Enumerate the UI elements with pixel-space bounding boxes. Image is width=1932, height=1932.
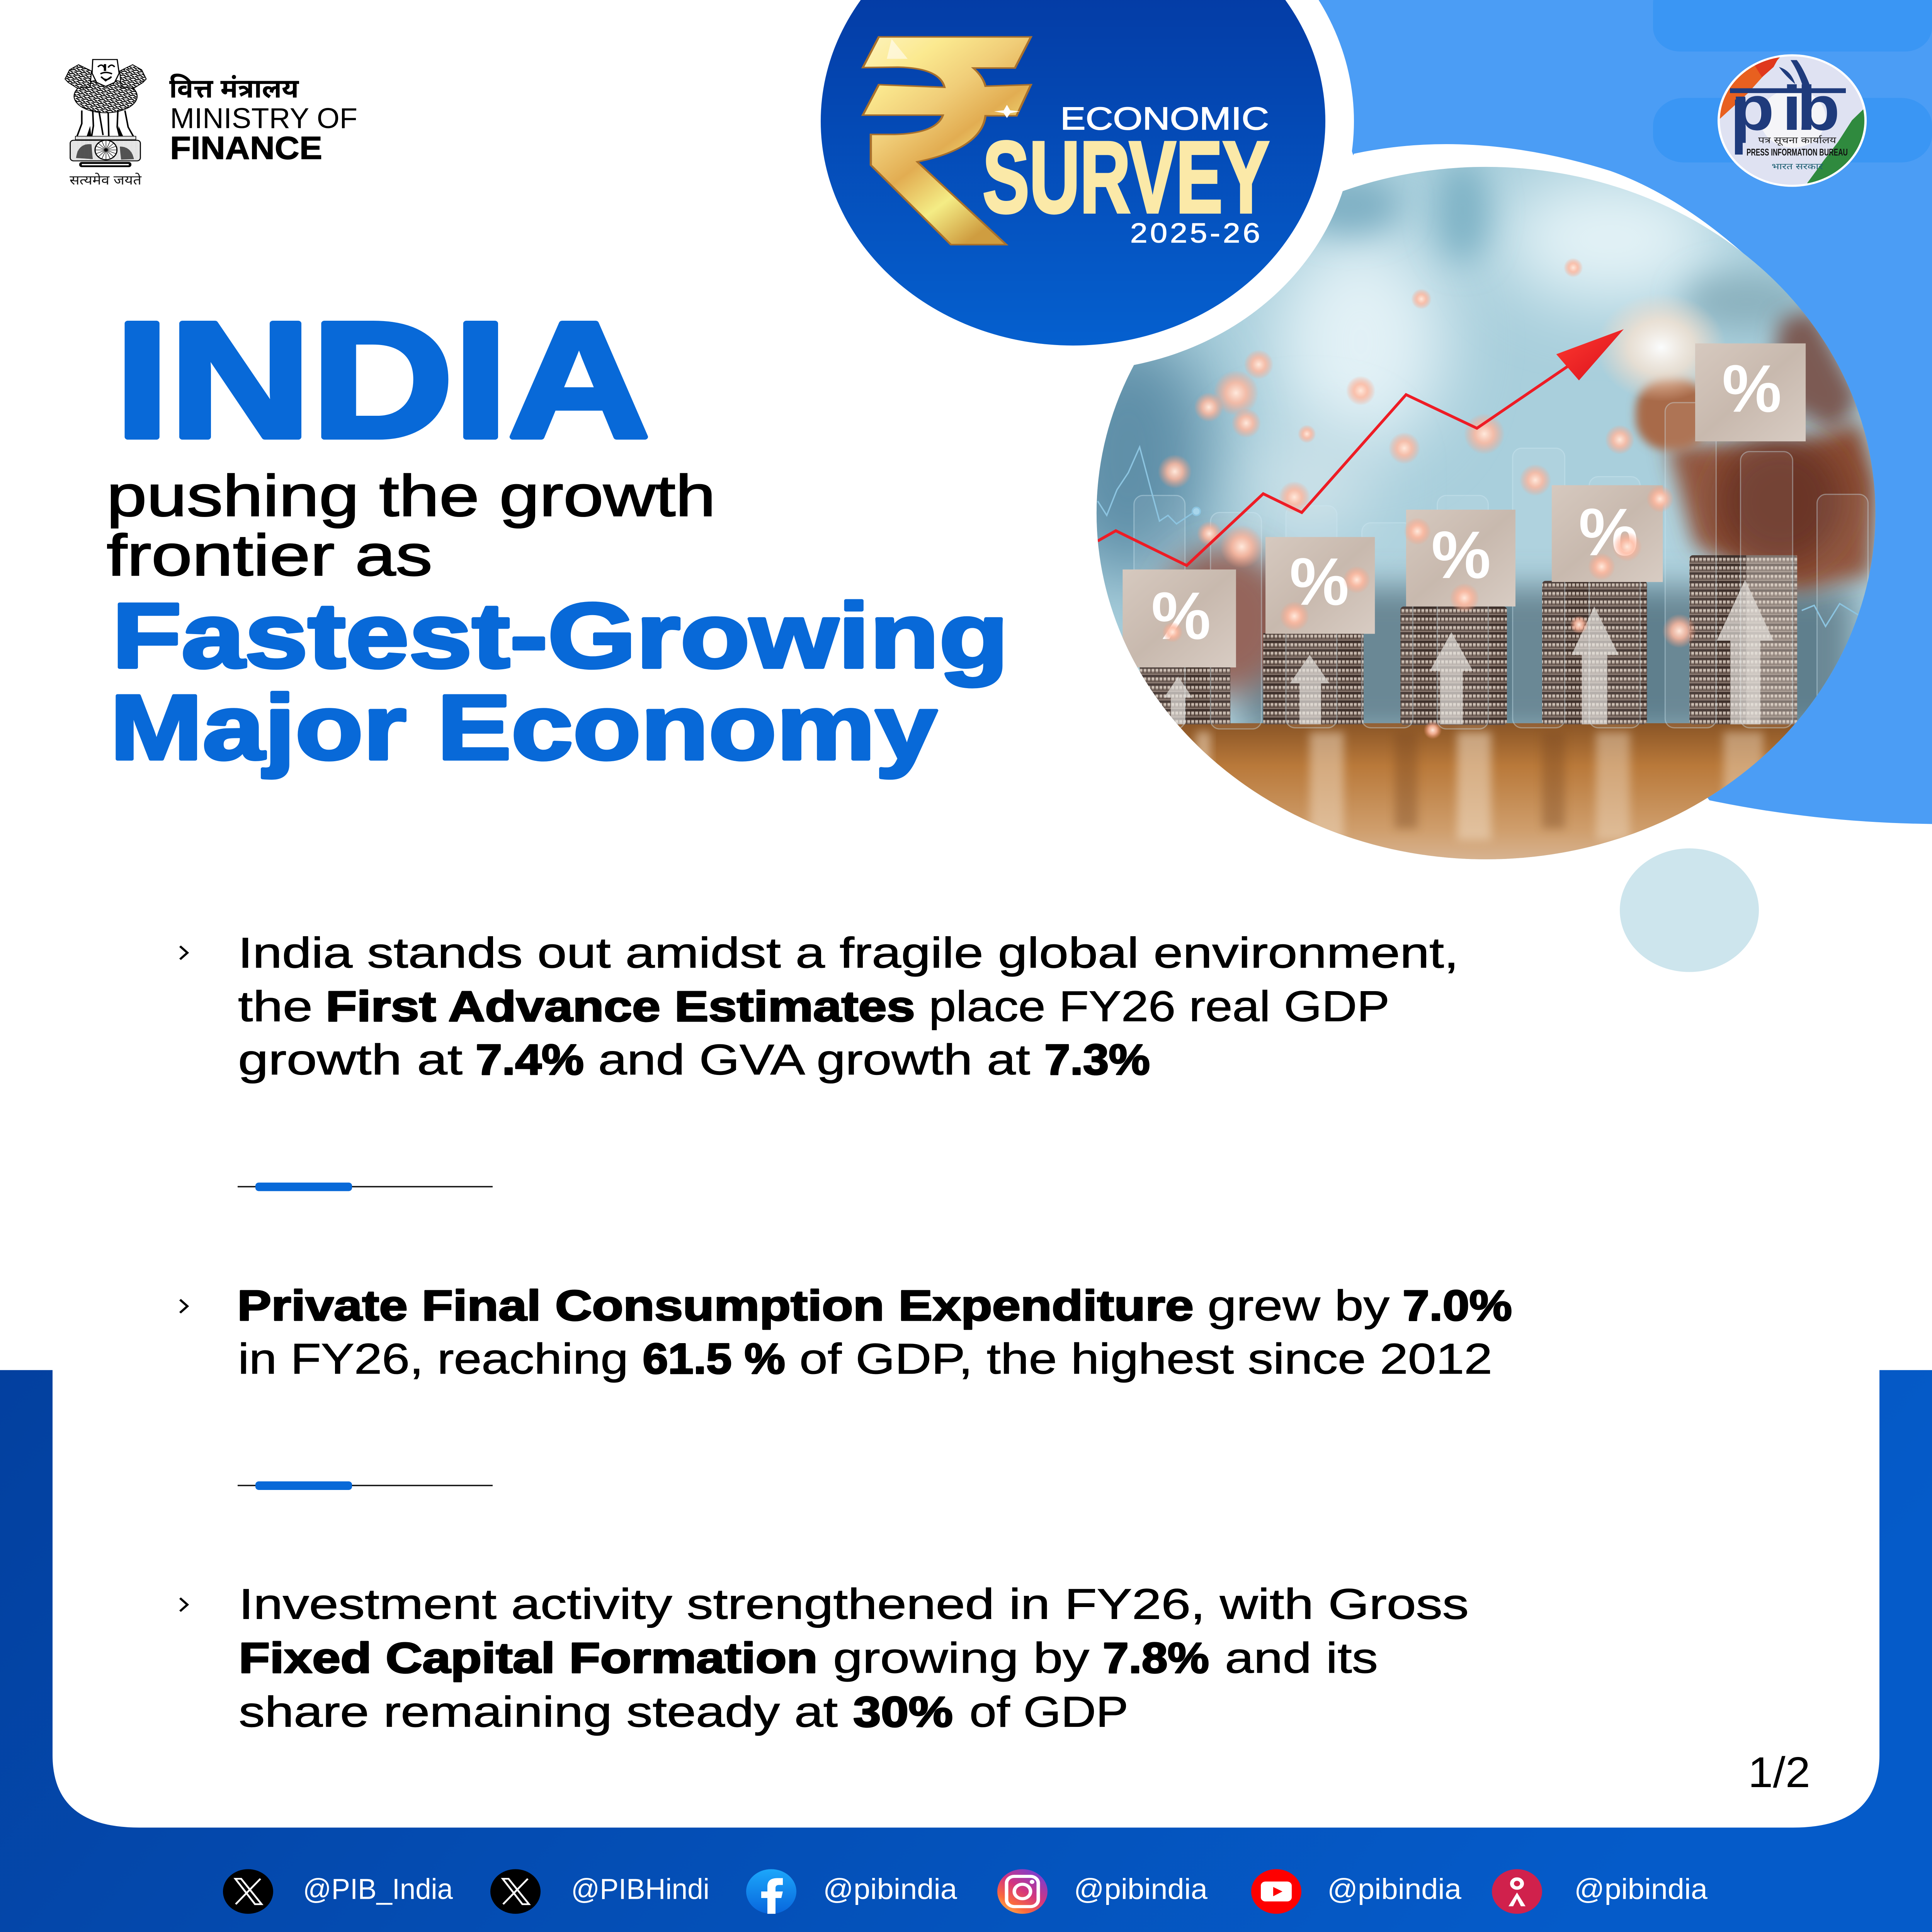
percent blocks: % (1722, 351, 1782, 426)
white ring around rupee seal (792, 0, 1354, 371)
text block: GDP growth: India stands out amidst a fragile global environment, (238, 929, 1459, 977)
label: economic: ECONOMIC (1060, 100, 1269, 136)
photo: coins, percent blocks and rising arrow (1043, 160, 1882, 866)
icon: facebook (746, 1869, 796, 1914)
text block: private consumption: of GDP, the highest since 2012 (799, 1335, 1492, 1383)
translucent bars (1134, 403, 1868, 729)
percent blocks: % (1431, 517, 1491, 592)
text block: GDP growth: First Advance Estimates (326, 983, 915, 1031)
text block: investment: 30% (853, 1688, 953, 1736)
coin stacks (1139, 555, 1797, 725)
text block: investment (180, 1580, 1469, 1736)
percent blocks: % (1579, 495, 1638, 570)
text block: private consumption: Private Final Consumption Expenditure (237, 1282, 1194, 1330)
red rising arrow (1098, 329, 1624, 565)
text block: investment: Fixed Capital Formation (239, 1634, 818, 1682)
text block: private consumption: 61.5 % (643, 1335, 785, 1383)
light blue corner shape (1306, 0, 1932, 824)
percent blocks: % (1151, 578, 1211, 653)
thin chart lines (1098, 447, 1859, 626)
text block: private consumption: grew by (1208, 1282, 1389, 1330)
emblem motto: सत्यमेव जयते (70, 172, 142, 187)
label: survey: SURVEY (983, 121, 1269, 234)
finance: FINANCE (170, 129, 322, 166)
economic survey seal (821, 0, 1325, 345)
wooden table (1176, 723, 1796, 859)
text block: private consumption: 7.0% (1403, 1282, 1512, 1330)
text block: private consumption (180, 1282, 1512, 1383)
text block: investment: Investment activity strengthened in FY26, with Gross (239, 1580, 1469, 1628)
up arrows on coin stacks (1164, 580, 1773, 724)
text block: private consumption: in FY26, reaching (238, 1335, 628, 1383)
icon: X (223, 1869, 273, 1914)
text block: investment: of GDP (969, 1688, 1128, 1736)
white crescent above photo (1270, 144, 1806, 513)
icon: koo (1492, 1869, 1542, 1914)
text block: GDP growth: the (238, 983, 313, 1031)
text block: investment: 7.8% (1103, 1634, 1209, 1682)
text block: GDP growth: 7.4% (476, 1036, 584, 1084)
social media bar (223, 1869, 1708, 1914)
title block (107, 288, 1009, 779)
text block: GDP growth: growth at (238, 1036, 463, 1084)
icon: gold rupee symbol (863, 37, 1031, 245)
handle: PIB Hindi: @PIBHindi (571, 1873, 709, 1906)
logo: ministry of finance (65, 60, 357, 187)
logo hindi line: पत्र सूचना कार्यालय (1758, 135, 1837, 146)
headline line one: Fastest-Growing (112, 584, 1009, 687)
text block: investment: and its (1225, 1634, 1378, 1682)
percent blocks (1122, 344, 1806, 667)
handle: koo: @pibindia (1574, 1873, 1708, 1906)
text block: GDP growth (180, 929, 1459, 1084)
page number: 1/2 (1748, 1748, 1810, 1796)
text block: GDP growth: and GVA growth at (598, 1036, 1030, 1084)
background: bottom blue band (0, 1370, 1932, 1932)
hand (1636, 310, 1876, 592)
icon: national emblem (65, 60, 146, 167)
label: year: 2025-26 (1130, 218, 1260, 249)
text block: GDP growth: place FY26 real GDP (929, 983, 1389, 1031)
handle: instagram: @pibindia (1074, 1873, 1208, 1906)
icon: instagram (997, 1869, 1048, 1914)
handle: PIB India: @PIB_India (303, 1873, 453, 1906)
bokeh lights (1158, 258, 1696, 739)
ministry english line: MINISTRY OF (170, 102, 357, 134)
logo english line: PRESS INFORMATION BUREAU (1747, 147, 1848, 158)
handle: youtube: @pibindia (1327, 1873, 1461, 1906)
pale decorative circle (1620, 849, 1759, 972)
logo government line: भारत सरकार (1772, 162, 1823, 171)
divider two (238, 1481, 493, 1490)
icon: youtube (1251, 1869, 1301, 1914)
handle: facebook: @pibindia (823, 1873, 957, 1906)
ministry hindi name: वित्त मंत्रालय (169, 73, 299, 103)
text block: GDP growth: 7.3% (1044, 1036, 1150, 1084)
headline line two: Major Economy (110, 675, 937, 779)
percent blocks: % (1289, 544, 1349, 619)
logo letters: pib (1731, 73, 1840, 143)
text block: investment: growing by (833, 1634, 1089, 1682)
text block: investment: share remaining steady at (239, 1688, 838, 1736)
divider one (238, 1182, 493, 1191)
subtitle line one: pushing the growth (107, 463, 716, 529)
title: india: INDIA (115, 288, 650, 472)
white content card (53, 1367, 1879, 1828)
icon: X second (490, 1869, 541, 1914)
logo: Press Information Bureau (1708, 51, 1878, 192)
subtitle line two: frontier as (107, 523, 432, 588)
